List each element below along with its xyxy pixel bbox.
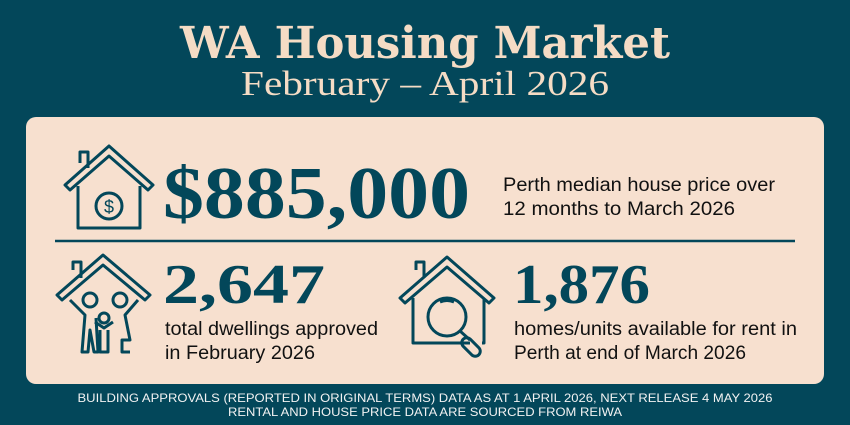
price description: Perth median house price over [503,175,776,196]
rentals description: Perth at end of March 2026 [514,343,746,364]
footer notes: BUILDING APPROVALS (REPORTED IN ORIGINAL TERMS) DATA AS AT 1 APRIL 2026, NEXT RELEASE 4 MAY 2026 [78,391,773,405]
icon: house with magnifier [400,257,494,358]
approvals description: in February 2026 [165,343,315,364]
subtitle: February – April 2026 [241,64,609,103]
icon: house with dollar [65,146,153,228]
rentals description: homes/units available for rent in [514,319,797,340]
icon: house with dollar: $ [104,197,114,217]
footer notes: RENTAL AND HOUSE PRICE DATA ARE SOURCED FROM REIWA [228,405,622,419]
big number: price: $885,000 [163,153,470,235]
title [179,18,671,103]
big number: approvals: 2,647 [163,254,325,316]
price description: 12 months to March 2026 [503,199,735,220]
approvals description: total dwellings approved [165,319,378,340]
big number: rentals: 1,876 [513,254,650,316]
icon: family house [57,255,150,352]
panel: stats [26,117,824,384]
title: WA Housing Market [179,18,671,69]
